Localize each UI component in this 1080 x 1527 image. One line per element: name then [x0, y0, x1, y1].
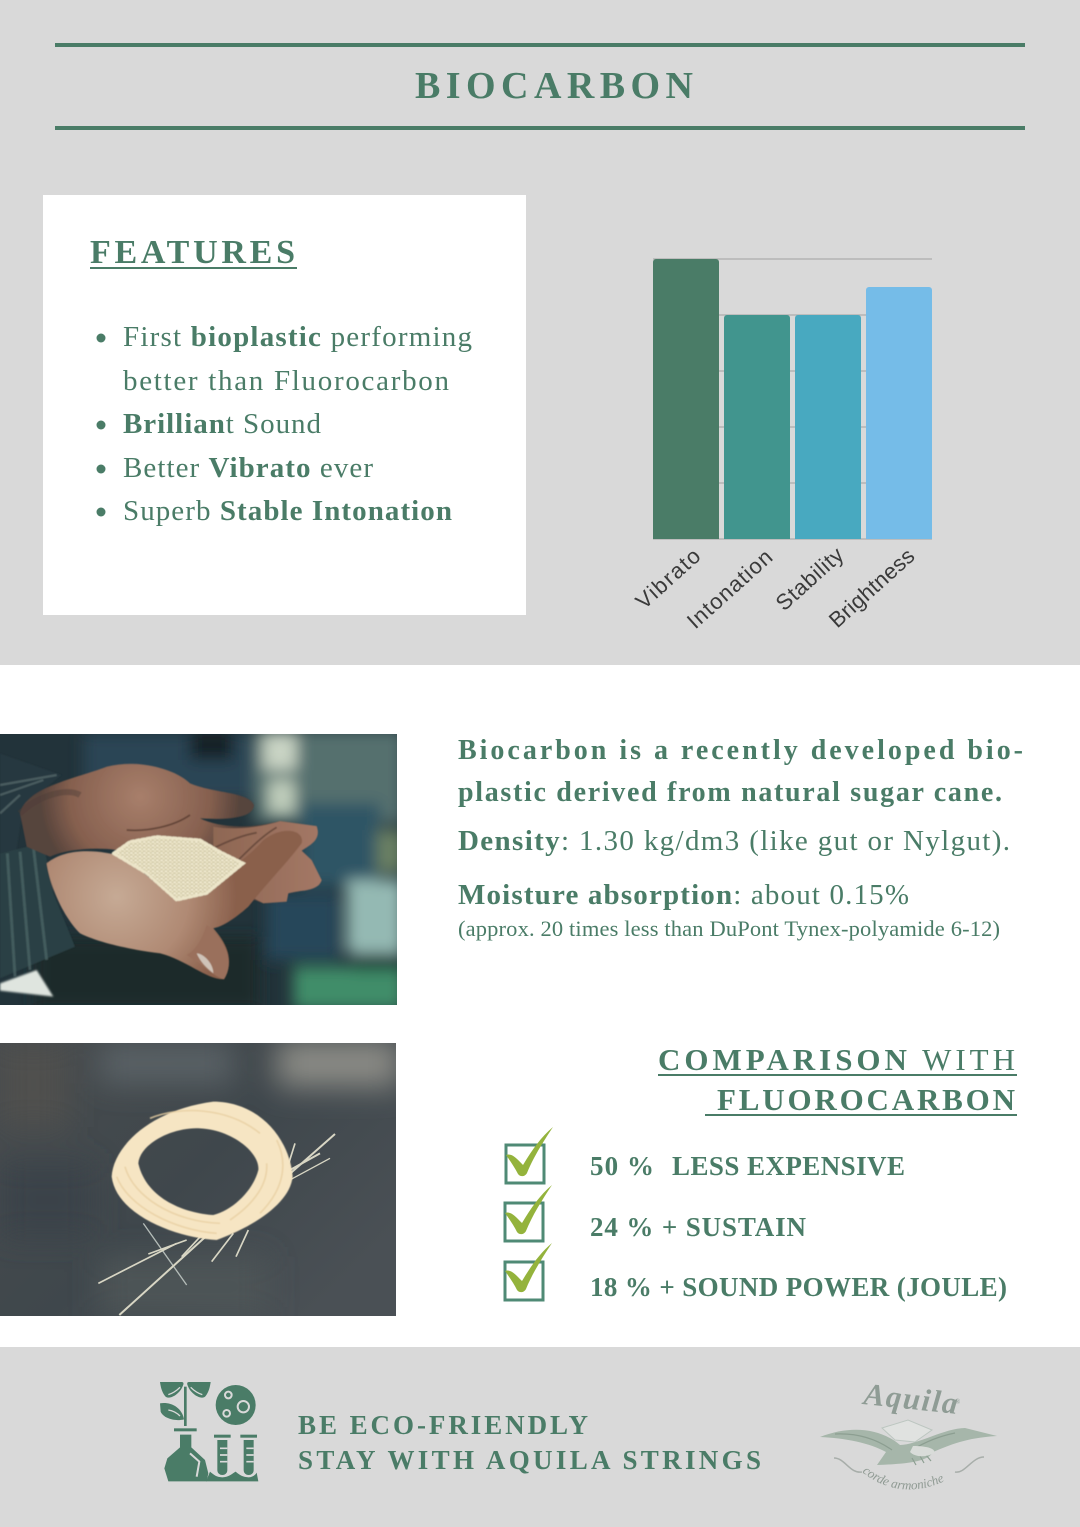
footer slogan: [298, 1410, 761, 1475]
text block: description: (approx. 20 times less than DuPont Tynex-polyamide 6-12): [458, 916, 1000, 941]
bar chart: Brightness: [824, 543, 919, 633]
bar chart: Intonation: [682, 544, 777, 634]
title band: [55, 43, 1025, 130]
footer slogan: STAY WITH AQUILA STRINGS: [298, 1445, 761, 1475]
bar chart: Stability: [771, 542, 848, 616]
panel: features: FEATURES: [90, 234, 295, 271]
text block: description: Density: 1.30 kg/dm3 (like gut or Nylgut).: [458, 825, 1010, 857]
heading: comparison with fluorocarbon: [658, 1042, 1017, 1117]
heading: comparison with fluorocarbon: FLUOROCARBON: [717, 1082, 1015, 1117]
white middle section background: [0, 665, 1080, 1347]
panel: features: [43, 195, 526, 615]
logo: Aquila corde armoniche: [820, 1376, 996, 1490]
comparison item: less expensive: [506, 1127, 905, 1183]
panel: features: Superb Stable Intonation: [123, 495, 452, 527]
comparison item: sustain: [505, 1185, 806, 1242]
logo: Aquila corde armoniche: Aquila: [860, 1376, 959, 1421]
comparison item: sustain: 24 % + SUSTAIN: [590, 1212, 806, 1242]
panel: features: better than Fluorocarbon: [123, 365, 450, 397]
icon: eco lab plant and test tubes: [160, 1382, 258, 1481]
comparison item: less expensive: 50 %: [590, 1151, 654, 1181]
bar chart: Vibrato: [631, 543, 705, 614]
comparison item: less expensive: LESS EXPENSIVE: [672, 1151, 905, 1181]
photo: hands holding pellets: [0, 730, 403, 1010]
comparison item: sound power: 18 % + SOUND POWER (JOULE): [590, 1272, 1007, 1302]
bar chart: [631, 259, 932, 634]
logo: Aquila corde armoniche: ®: [955, 1398, 961, 1406]
panel: features: Better Vibrato ever: [123, 452, 373, 484]
title band: BIOCARBON: [415, 65, 693, 107]
top grey section background: [0, 0, 1080, 665]
logo: Aquila corde armoniche: corde armoniche: [863, 1468, 944, 1490]
footer slogan: BE ECO-FRIENDLY: [298, 1410, 588, 1440]
footer grey section background: [0, 1347, 1080, 1527]
text block: description: Moisture absorption: about 0.15%: [458, 879, 909, 911]
photo: coil of strings: [0, 1040, 400, 1317]
comparison item: sound power: [505, 1243, 1007, 1302]
text block: description: Biocarbon is a recently developed bio-: [458, 735, 1023, 766]
text block: description: [458, 735, 1023, 941]
heading: comparison with fluorocarbon: COMPARISON WITH: [658, 1042, 1015, 1077]
panel: features: Brilliant Sound: [123, 408, 322, 440]
text block: description: plastic derived from natural sugar cane.: [458, 777, 1002, 808]
panel: features: First bioplastic performing: [123, 321, 472, 353]
